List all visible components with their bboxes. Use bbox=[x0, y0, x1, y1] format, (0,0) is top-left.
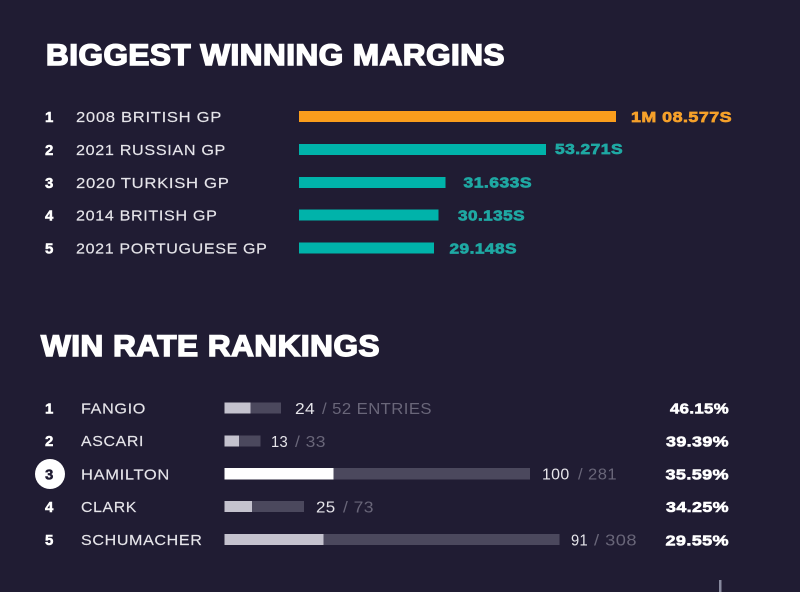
row 5: Schumacher: 91 bbox=[571, 532, 588, 550]
row 2: 2021 Russian GP bbox=[45, 141, 623, 159]
row 4: Clark: 25 bbox=[316, 500, 336, 516]
row 5: Schumacher: 29.55% bbox=[666, 532, 729, 550]
row 3: Hamilton (highlighted) bbox=[35, 459, 729, 489]
row 1: Fangio: FANGIO bbox=[81, 400, 146, 418]
row 1: 2008 British GP: 1M 08.577S bbox=[631, 109, 732, 126]
row 2: Ascari: 13 bbox=[271, 434, 288, 451]
row 5: Schumacher bbox=[45, 532, 729, 550]
row 4: Clark: 4 bbox=[45, 499, 54, 516]
row 1: Fangio: 46.15% bbox=[670, 400, 729, 418]
row 4: 2014 British GP: 30.135S bbox=[458, 208, 525, 224]
row 1: Fangio: / 52 ENTRIES bbox=[322, 401, 432, 418]
row 5: 2021 Portuguese GP: 2021 PORTUGUESE GP bbox=[76, 240, 268, 258]
row 3: Hamilton (highlighted): 3 bbox=[45, 466, 53, 484]
row 4: 2014 British GP: 4 bbox=[45, 208, 54, 224]
row 5: Schumacher: / 308 bbox=[594, 532, 637, 550]
row 2: Ascari: ASCARI bbox=[81, 433, 144, 450]
row 5: 2021 Portuguese GP bbox=[45, 240, 517, 258]
row 2: 2021 Russian GP: 53.271S bbox=[555, 141, 623, 158]
row 4: Clark bbox=[45, 499, 729, 516]
vertical tick at bottom edge bbox=[719, 580, 722, 592]
row 5: 2021 Portuguese GP: 5 bbox=[45, 240, 53, 258]
row 5: Schumacher: 5 bbox=[45, 532, 53, 549]
row 2: Ascari: 2 bbox=[45, 433, 53, 450]
panel: biggest winning margins bbox=[45, 39, 732, 258]
row 5: 2021 Portuguese GP: 29.148S bbox=[450, 240, 517, 258]
row 4: Clark: CLARK bbox=[81, 499, 137, 516]
row 4: Clark: 34.25% bbox=[666, 499, 729, 516]
row 3: Hamilton (highlighted): HAMILTON bbox=[81, 466, 170, 484]
icon: highlighted rank circle bbox=[35, 459, 65, 489]
row 1: Fangio: 24 bbox=[295, 401, 315, 418]
row 2: Ascari: / 33 bbox=[295, 434, 326, 451]
row 3: 2020 Turkish GP: 2020 TURKISH GP bbox=[76, 175, 230, 192]
row 3: Hamilton (highlighted): 100 bbox=[542, 466, 570, 484]
row 4: 2014 British GP bbox=[45, 208, 525, 224]
row 4: 2014 British GP: 2014 BRITISH GP bbox=[76, 208, 218, 224]
heading: biggest winning margins: BIGGEST WINNING MARGINS bbox=[46, 39, 505, 72]
row 5: Schumacher: SCHUMACHER bbox=[81, 532, 202, 549]
row 1: Fangio: 1 bbox=[45, 400, 53, 418]
row 3: Hamilton (highlighted): / 281 bbox=[578, 466, 617, 484]
row 2: 2021 Russian GP: 2 bbox=[45, 142, 53, 159]
row 3: Hamilton (highlighted): 35.59% bbox=[666, 466, 729, 484]
row 4: Clark: / 73 bbox=[343, 500, 374, 516]
row 3: 2020 Turkish GP: 3 bbox=[45, 175, 53, 192]
row 1: 2008 British GP: 1 bbox=[45, 109, 53, 126]
row 1: Fangio bbox=[45, 400, 729, 418]
row 2: Ascari bbox=[45, 433, 729, 451]
heading: win rate rankings: WIN RATE RANKINGS bbox=[41, 330, 380, 363]
panel: win rate rankings bbox=[35, 330, 729, 550]
row 2: 2021 Russian GP: 2021 RUSSIAN GP bbox=[76, 142, 226, 159]
row 2: Ascari: 39.39% bbox=[666, 434, 729, 450]
row 3: 2020 Turkish GP: 31.633S bbox=[464, 174, 532, 192]
row 3: 2020 Turkish GP bbox=[45, 174, 532, 192]
row 1: 2008 British GP bbox=[45, 109, 732, 126]
row 1: 2008 British GP: 2008 BRITISH GP bbox=[76, 109, 222, 126]
